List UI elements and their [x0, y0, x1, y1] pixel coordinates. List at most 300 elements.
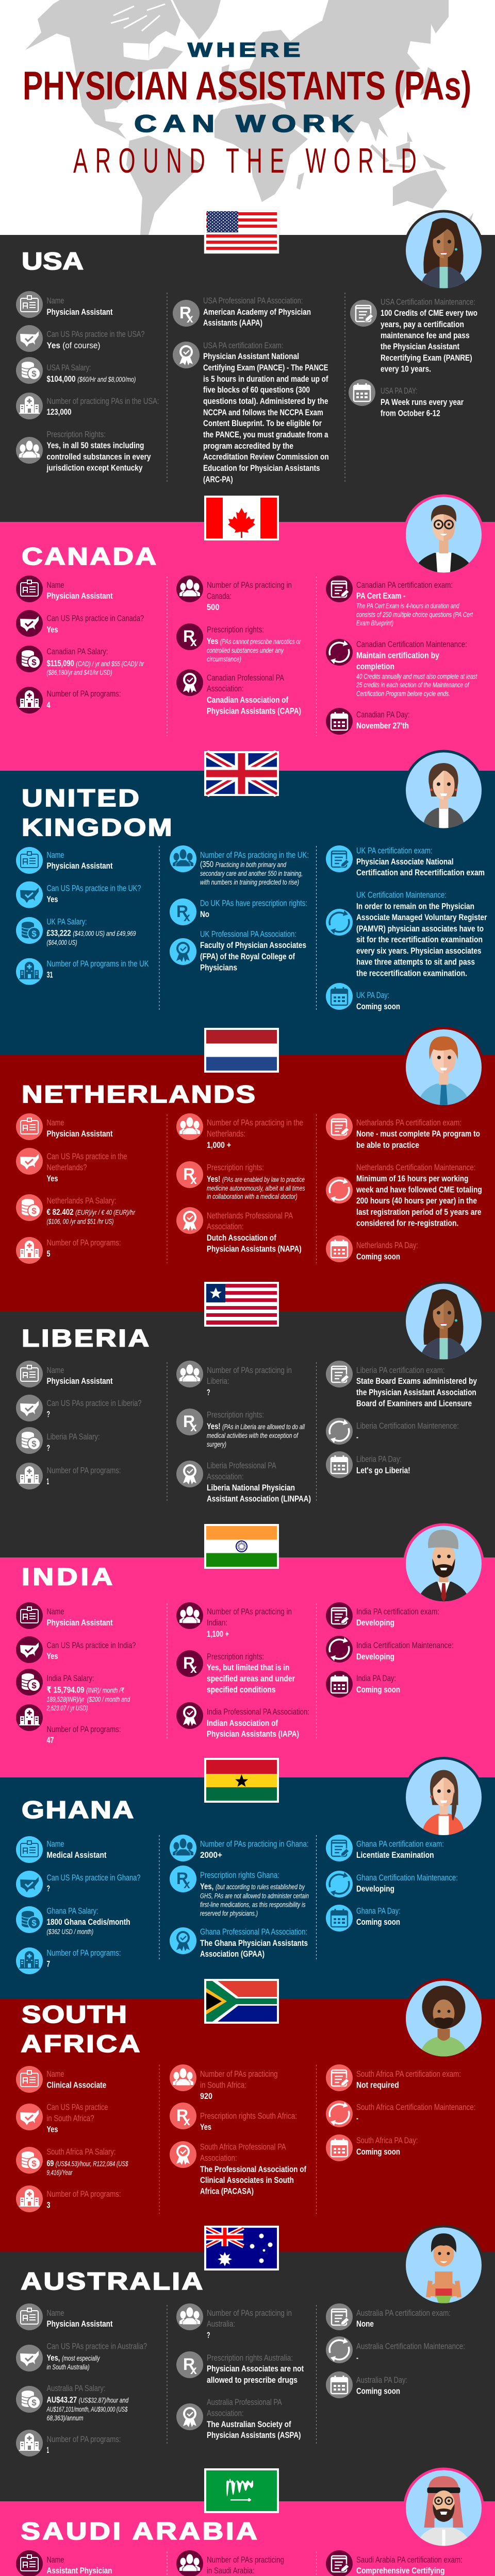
- item: Can practice: Can US PAs practice in the: [46, 1151, 127, 1161]
- item: Certification maintenance: Minimum of 16 hours per working: [356, 1174, 468, 1183]
- item: Programs: Number of PA programs:: [46, 1466, 121, 1476]
- item: Certification exam: [326, 1602, 439, 1629]
- item: Certification exam: [326, 1361, 477, 1409]
- panel: Ghana: [0, 1758, 495, 1998]
- item: Can practice: in South Africa?: [46, 2113, 94, 2123]
- item: Number practicing: Number of PAs practicing in: [207, 580, 292, 590]
- item: Certification exam: [326, 2064, 461, 2091]
- item: PA day: Coming soon: [356, 2147, 400, 2157]
- item: Programs: Number of PA programs:: [46, 1238, 121, 1248]
- item: Salary: 189,528(INR)/yr ($200 / month and: [46, 1696, 130, 1703]
- item: Name: Physician Assistant: [46, 307, 113, 317]
- item: PA day: November 27'th: [356, 721, 409, 731]
- item: Programs: Number of PA programs in the UK: [46, 959, 149, 969]
- item: Association: Dutch Association of: [207, 1233, 276, 1243]
- panel: Netherlands: [0, 1028, 495, 1311]
- item: Salary: [16, 357, 136, 384]
- item: Number practicing: [176, 1361, 292, 1397]
- item: Prescription rights: controlled substances in every: [46, 452, 151, 462]
- item: Salary: [16, 2147, 128, 2177]
- item: Association: Physicians: [200, 963, 237, 973]
- item: Association: Assistants (AAPA): [203, 318, 262, 328]
- item: Certification maintenance: India Certification Maintenance:: [356, 1640, 454, 1650]
- item: Programs: [16, 1463, 121, 1489]
- item: Certification exam: [326, 575, 473, 627]
- item: Name: [16, 2303, 113, 2330]
- item: Certification maintenance: Developing: [356, 1652, 394, 1662]
- item: Certification exam: Exam Blueprint): [356, 619, 393, 627]
- heading: Netherlands: NETHERLANDS: [22, 1081, 255, 1108]
- item: Certification exam: the PANCE, you must graduate from a: [203, 430, 328, 439]
- item: Prescription rights: Prescription rights:: [207, 1652, 264, 1662]
- item: Prescription rights: Prescription rights Australia:: [207, 2353, 293, 2363]
- item: Can practice: [16, 882, 141, 908]
- item: Number practicing: secondary care and another 550 in training,: [200, 870, 303, 877]
- item: Salary: AU$167,101/month, AU$90,000 (US$: [46, 2405, 128, 2413]
- item: Association: [176, 2397, 301, 2440]
- item: Certification exam: Developing: [356, 1618, 394, 1628]
- item: Certification exam: Accreditation Review Commission on: [203, 452, 329, 462]
- heading: Canada: CANADA: [22, 543, 156, 570]
- item: Certification maintenance: the Physician Assistant: [381, 342, 459, 351]
- item: Certification maintenance: [350, 297, 477, 374]
- item: Association: Physician Assistants (ASPA): [207, 2430, 301, 2440]
- item: Prescription rights: allowed to prescribe drugs: [207, 2375, 298, 2385]
- item: Salary: India PA Salary:: [46, 1673, 94, 1683]
- item: Number practicing: Australia:: [207, 2319, 235, 2329]
- item: Name: [16, 847, 113, 874]
- item: Number practicing: [170, 845, 309, 886]
- item: Number practicing: 920: [200, 2091, 212, 2101]
- item: Programs: Number of PA programs:: [46, 2434, 121, 2444]
- item: Number practicing: Number of PAs practicing in Ghana:: [200, 1839, 309, 1849]
- flag: UK: [204, 751, 279, 796]
- item: PA day: Coming soon: [356, 2386, 400, 2396]
- item: Salary: UK PA Salary:: [46, 917, 87, 926]
- item: Number practicing: Liberia:: [207, 1376, 229, 1386]
- item: Programs: Number of PA programs:: [46, 1948, 121, 1958]
- item: Salary: AU$43.27 (US$32.87)/hour and: [46, 2395, 128, 2405]
- item: Number practicing: in South Africa:: [200, 2080, 246, 2090]
- panel: Canada: [0, 496, 495, 771]
- flag: Netherlands: [204, 1028, 279, 1073]
- avatar: USA woman: [404, 211, 483, 292]
- item: Number practicing: Number of PAs practicing in: [207, 2308, 292, 2318]
- item: Prescription rights: surgery): [207, 1440, 226, 1448]
- item: Salary: ($86,180/yr and $41/hr USD): [46, 669, 112, 676]
- item: Association: USA Professional PA Association:: [203, 296, 303, 306]
- item: Programs: 3: [46, 2200, 51, 2210]
- item: Number practicing: (350 Practicing in both primary and: [200, 859, 286, 869]
- item: Name: Name: [46, 1839, 64, 1849]
- item: Certification maintenance: [326, 2336, 465, 2363]
- item: Salary: ($362 USD / month): [46, 1928, 93, 1936]
- item: Programs: [16, 958, 149, 985]
- item: Programs: 47: [46, 1735, 54, 1745]
- item: Number practicing: Netherlands:: [207, 1129, 245, 1139]
- item: Certification exam: Licentiate Examination: [356, 1850, 434, 1860]
- item: Name: Physician Assistant: [46, 861, 113, 871]
- item: Salary: [16, 1194, 135, 1226]
- item: Can practice: Can US PAs practice in Liberia?: [46, 1398, 141, 1408]
- item: PA day: Coming soon: [356, 1002, 400, 1011]
- item: Association: Netherlands Professional PA: [207, 1211, 293, 1221]
- item: Prescription rights: [170, 1866, 309, 1918]
- item: Association: The Australian Society of: [207, 2419, 291, 2429]
- item: Can practice: Can US PAs practice in the UK?: [46, 884, 141, 893]
- item: Salary: ₹ 15,794.09 (INR)/ month /₹: [46, 1685, 124, 1695]
- item: Name: Name: [46, 1365, 64, 1375]
- item: Can practice: Can US PAs practice in Ghana?: [46, 1873, 140, 1883]
- item: Name: [16, 2066, 106, 2093]
- item: Association: [176, 1702, 309, 1739]
- item: PA day: [326, 2134, 418, 2161]
- title line: can work: CAN WORK: [134, 110, 354, 137]
- item: PA day: [326, 1451, 410, 1478]
- item: Certification exam: Education for Physician Assistants: [203, 463, 320, 473]
- item: Prescription rights: Physician Associates are not: [207, 2364, 304, 2374]
- item: Prescription rights: medical activities with the exception of: [207, 1432, 299, 1439]
- item: Prescription rights: controlled substances under any: [207, 647, 284, 654]
- item: Certification exam: Ghana PA certification exam:: [356, 1839, 444, 1849]
- item: Prescription rights: Yes! (PAs in Liberia are allowed to do all: [207, 1421, 305, 1431]
- item: PA day: Canadian PA Day:: [356, 710, 409, 720]
- item: Prescription rights: [170, 899, 307, 925]
- item: Certification maintenance: Maintain certification by: [356, 650, 439, 660]
- item: Association: Association:: [207, 1222, 244, 1231]
- item: Prescription rights: specified areas and under: [207, 1674, 295, 1684]
- item: Certification maintenance: UK Certification Maintenance:: [356, 890, 447, 900]
- item: Certification maintenance: Ghana Certification Maintenance:: [356, 1873, 458, 1883]
- item: Prescription rights: Yes: [200, 2122, 211, 2132]
- item: Certification exam: is 5 hours in duration and made up of: [203, 374, 328, 384]
- item: Name: Physician Assistant: [46, 1376, 113, 1386]
- item: Salary: Canadian PA Salary:: [46, 647, 108, 656]
- item: Certification maintenance: Australia Certification Maintenance:: [356, 2342, 465, 2351]
- item: Number practicing: Number of PAs practicing in the: [207, 1118, 303, 1128]
- item: Certification exam: (ARC-PA): [203, 474, 233, 484]
- item: Certification maintenance: -: [356, 2113, 358, 2123]
- item: Name: [16, 575, 113, 602]
- avatar: Ghana woman with braid: [404, 1758, 483, 1838]
- item: Prescription rights: Yes! (PAs are enabled by law to practice: [207, 1174, 305, 1184]
- item: Certification exam: NCCPA and follows the NCCPA Exam: [203, 408, 323, 417]
- item: Programs: Number of PA programs:: [46, 1724, 121, 1734]
- item: Certification exam: Content Blueprint. To be eligible for: [203, 418, 322, 428]
- item: Salary: 9,416)/Year: [46, 2169, 73, 2177]
- item: Can practice: Can US PAs practice in Australia?: [46, 2342, 147, 2351]
- item: Certification maintenance: [326, 1163, 482, 1228]
- item: Number practicing: Number of PAs practicing in: [207, 1365, 292, 1375]
- item: Name: [16, 1361, 113, 1387]
- heading: Ghana: GHANA: [22, 1797, 134, 1824]
- item: PA day: Liberia PA Day:: [356, 1454, 402, 1464]
- item: Salary: £33,222 ($43,000 US) and £49,969: [46, 928, 136, 938]
- item: PA day: Let's go Liberia!: [356, 1466, 410, 1476]
- item: Certification exam: Saudi Arabia PA certification exam:: [356, 2555, 463, 2565]
- item: Salary: USA PA Salary:: [46, 363, 91, 372]
- item: Certification exam: UK PA certification exam:: [356, 845, 433, 855]
- item: Programs: [16, 1947, 121, 1974]
- item: Prescription rights: [16, 430, 151, 473]
- item: Programs: 5: [46, 1249, 51, 1259]
- item: Association: Assistant Association (LINPAA): [207, 1494, 311, 1503]
- item: Certification maintenance: [326, 1636, 454, 1663]
- item: Certification exam: The PA Cert Exam is 4-hours in duration and: [356, 602, 459, 610]
- panel: USA: [0, 210, 495, 522]
- item: Can practice: Can US PAs practice in Canada?: [46, 613, 144, 623]
- item: Prescription rights: Prescription rights:: [207, 624, 264, 634]
- item: Certification maintenance: Recertifying Exam (PANRE): [381, 353, 472, 363]
- item: Name: Assistant Physician: [46, 2566, 112, 2575]
- title: [23, 39, 471, 180]
- item: Salary: ?: [46, 1443, 50, 1453]
- item: Prescription rights: Prescription rights Ghana:: [200, 1870, 279, 1880]
- avatar: Saudi man: [404, 2469, 483, 2549]
- item: Certification exam: be able to practice: [356, 1140, 419, 1150]
- panel: Australia: [0, 2226, 495, 2502]
- item: PA day: Australia PA Day:: [356, 2375, 407, 2385]
- item: PA day: Coming soon: [356, 1251, 400, 1261]
- item: Salary: Australia PA Salary:: [46, 2383, 105, 2393]
- item: Name: Physician Assistant: [46, 1129, 113, 1139]
- panel: United Kingdom: [0, 751, 495, 1055]
- item: Number practicing: [176, 1602, 292, 1639]
- item: Prescription rights: [176, 2351, 304, 2385]
- item: Salary: Liberia PA Salary:: [46, 1432, 100, 1442]
- item: Number practicing: with numbers in training predicted to rise): [200, 878, 299, 886]
- item: Association: (FPA) of the Royal College of: [200, 952, 295, 961]
- item: Salary: 1800 Ghana Cedis/month: [46, 1917, 130, 1927]
- item: Prescription rights: Yes, (but according to rules established by: [200, 1882, 305, 1891]
- item: Salary: [16, 646, 144, 676]
- flag: Australia: [204, 2226, 279, 2270]
- item: Certification exam: PA Cert Exam -: [356, 591, 405, 601]
- item: Certification maintenance: Canadian Certification Maintenance:: [356, 639, 467, 649]
- item: Association: Ghana Professional PA Association:: [200, 1927, 307, 1937]
- item: Prescription rights: Yes (PAs cannot prescribe narcotics or: [207, 636, 301, 646]
- item: Certification exam: Liberia PA certification exam:: [356, 1365, 444, 1375]
- flag: USA: [204, 210, 279, 253]
- item: Salary: 2,623.07 / yr USD): [46, 1704, 88, 1712]
- item: Association: Association:: [207, 1472, 244, 1482]
- item: Can practice: [16, 2103, 108, 2134]
- item: Salary: ($106, 00 /yr and $51 /hr US): [46, 1218, 113, 1226]
- item: Certification exam: Netharlands PA certification exam:: [356, 1118, 461, 1128]
- panel: Saudi Arabia: [0, 2468, 495, 2576]
- item: Association: Physician Assistants (NAPA): [207, 1244, 302, 1254]
- item: Certification maintenance: [326, 1871, 458, 1897]
- item: Prescription rights: Do UK PAs have prescription rights:: [200, 899, 307, 908]
- item: PA day: [326, 2371, 407, 2398]
- item: Certification exam: Comprehensive Certifying: [356, 2566, 444, 2575]
- heading: United Kingdom: KINGDOM: [22, 814, 172, 841]
- item: PA day: from October 6-12: [381, 409, 440, 418]
- panel: Liberia: [0, 1282, 495, 1557]
- item: Certification exam: questions total). Administered by the: [203, 396, 328, 406]
- item: Can practice: Yes: [46, 1174, 58, 1183]
- item: Certification exam: South Africa PA certification exam:: [356, 2069, 461, 2079]
- heading: Saudi Arabia: SAUDI ARABIA: [21, 2518, 257, 2545]
- item: Prescription rights: [170, 2103, 297, 2132]
- item: Association: Indian Association of: [207, 1718, 278, 1728]
- item: Prescription rights: Yes, but limited that is in: [207, 1663, 289, 1672]
- item: Prescription rights: GHS, PAs are not allowed to administer certain: [200, 1892, 309, 1900]
- item: PA day: PA Week runs every year: [381, 397, 464, 407]
- item: Prescription rights: Yes, in all 50 states including: [46, 440, 144, 450]
- heading: South Africa: AFRICA: [21, 2030, 140, 2058]
- item: Prescription rights: Prescription rights:: [207, 1163, 264, 1173]
- avatar: India man with turban: [404, 1524, 483, 1605]
- item: Association: Clinical Associates in South: [200, 2175, 294, 2185]
- item: Association: [176, 669, 301, 716]
- item: Association: Liberia National Physician: [207, 1483, 295, 1493]
- item: Name: [16, 1602, 113, 1629]
- item: Salary: $115,090 (CAD) / yr and $55 (CAD)/ hr: [46, 658, 144, 668]
- item: Name: Physician Assistant: [46, 1618, 113, 1628]
- item: Certification exam: USA PA certification Exam:: [203, 341, 284, 350]
- item: Salary: ($64,000 US): [46, 939, 77, 946]
- item: Name: [16, 1113, 113, 1140]
- item: Salary: Ghana PA Salary:: [46, 1906, 98, 1916]
- heading: South Africa: [21, 2001, 140, 2058]
- panel: India: [0, 1524, 495, 1777]
- item: Name: Physician Assistant: [46, 591, 113, 601]
- item: Salary: [16, 1427, 100, 1454]
- item: Salary: [16, 2383, 128, 2422]
- item: Prescription rights: [176, 623, 301, 663]
- item: Number practicing: [170, 1835, 309, 1861]
- item: Prescription rights: reserved for physicians.): [200, 1909, 258, 1918]
- avatar: Netherlands man: [404, 1028, 483, 1109]
- item: Certification maintenance: every 10 years.: [381, 364, 431, 374]
- item: Programs: [16, 687, 121, 714]
- item: Number practicing: Indian:: [207, 1618, 227, 1628]
- item: Number practicing: ?: [207, 1387, 210, 1397]
- item: Number practicing: Canada:: [207, 591, 232, 601]
- item: Can practice: Yes, (most especially: [46, 2353, 100, 2363]
- item: Association: [170, 2141, 306, 2196]
- item: Can practice: Netherlands?: [46, 1163, 87, 1173]
- item: Can practice: Yes: [46, 624, 58, 634]
- item: Prescription rights: Prescription rights:: [207, 1410, 264, 1420]
- item: Can practice: Can US PAs practice in India?: [46, 1640, 136, 1650]
- item: Salary: Netherlands PA Salary:: [46, 1196, 117, 1206]
- item: Name: [16, 1836, 107, 1863]
- item: Certification maintenance: -: [356, 2353, 358, 2363]
- item: Certification exam: [326, 2303, 451, 2330]
- item: Certification exam: [326, 845, 485, 877]
- item: PA day: [326, 983, 400, 1011]
- item: PA day: Ghana PA Day:: [356, 1906, 401, 1916]
- item: Salary: 68,363)/annum: [46, 2414, 84, 2422]
- title line: around the world: AROUND THE WORLD: [73, 141, 417, 180]
- item: Programs: [16, 2185, 121, 2212]
- item: Number practicing: Number of practicing PAs in the USA:: [46, 396, 159, 406]
- avatar: South Africa man with afro: [404, 1979, 483, 2060]
- item: Certification exam: Certifying Exam (PANCE) - The PANCE: [203, 363, 328, 372]
- item: Can practice: in South Australia): [46, 2363, 90, 2371]
- heading: United Kingdom: [22, 785, 172, 841]
- item: Programs: [16, 1704, 121, 1745]
- item: Association: [170, 929, 306, 973]
- item: Certification exam: [173, 341, 329, 484]
- item: Can practice: [16, 2342, 147, 2371]
- panel: South Africa: [0, 1979, 495, 2252]
- item: Certification maintenance: [326, 1418, 459, 1445]
- item: Certification exam: five blocks of 60 questions (300: [203, 385, 310, 395]
- item: Number practicing: Number of PAs practicing: [200, 2069, 278, 2079]
- item: Number practicing: Number of PAs practicing: [207, 2555, 284, 2565]
- item: Programs: Number of PA programs:: [46, 2189, 121, 2199]
- item: PA day: USA PA DAY:: [381, 386, 418, 396]
- item: PA day: South Africa PA Day:: [356, 2136, 418, 2145]
- item: Association: American Academy of Physician: [203, 307, 311, 317]
- item: Prescription rights: [176, 1409, 305, 1448]
- item: Programs: 31: [46, 970, 53, 980]
- avatar: Canada man with glasses: [404, 496, 483, 576]
- item: Can practice: [16, 325, 144, 352]
- item: Number practicing: Number of PAs practicing in: [207, 1607, 292, 1617]
- item: Certification maintenance: considered for re-registration.: [356, 1218, 458, 1228]
- item: Certification maintenance: completion: [356, 662, 394, 671]
- item: Name: [16, 2550, 112, 2576]
- item: Name: Name: [46, 296, 64, 306]
- item: Association: Africa (PACASA): [200, 2187, 254, 2196]
- item: Number practicing: in Saudi Arabia:: [207, 2566, 255, 2575]
- item: Number practicing: [176, 575, 292, 612]
- item: Name: Name: [46, 850, 64, 860]
- item: Name: Clinical Associate: [46, 2080, 106, 2090]
- item: Can practice: Yes: [46, 894, 58, 904]
- heading: India: INDIA: [22, 1564, 112, 1590]
- item: Can practice: [16, 610, 144, 637]
- item: Certification exam: [326, 1835, 444, 1861]
- item: Certification maintenance: Liberia Certification Maintenence:: [356, 1421, 459, 1431]
- item: Can practice: ?: [46, 1410, 50, 1419]
- item: Association: Physician Assistants (IAPA): [207, 1729, 299, 1739]
- item: Association: Association:: [200, 2153, 237, 2163]
- item: Prescription rights: jurisdiction except Kentucky: [46, 463, 143, 473]
- item: PA day: Coming soon: [356, 1685, 400, 1694]
- item: Number practicing: 123,000: [46, 407, 71, 417]
- item: Prescription rights: specified conditions: [207, 1685, 275, 1694]
- item: Number practicing: 500: [207, 602, 220, 612]
- heading: South Africa: SOUTH: [22, 2001, 127, 2028]
- item: Certification exam: Not required: [356, 2080, 399, 2090]
- flag: India: [204, 1524, 279, 1569]
- item: Prescription rights: Prescription rights South Africa:: [200, 2111, 297, 2121]
- item: Association: Canadian Professional PA: [207, 673, 284, 683]
- item: Can practice: Yes: [46, 1651, 58, 1661]
- item: Name: Name: [46, 1118, 64, 1128]
- item: Association: [173, 296, 311, 328]
- item: Can practice: [16, 1636, 136, 1663]
- item: Can practice: ?: [46, 1884, 50, 1893]
- item: PA day: UK PA Day:: [356, 990, 389, 1000]
- item: Salary: South Africa PA Salary:: [46, 2147, 116, 2157]
- item: PA day: Netherlands PA Day:: [356, 1241, 418, 1250]
- heading: United Kingdom: UNITED: [22, 785, 139, 812]
- item: PA day: Coming soon: [356, 1917, 400, 1927]
- heading: USA: USA: [22, 248, 84, 275]
- item: Association: Association (GPAA): [200, 1949, 265, 1959]
- item: Name: [16, 291, 113, 318]
- item: PA day: [326, 1905, 401, 1931]
- item: Salary: [16, 1906, 130, 1936]
- heading: Liberia: LIBERIA: [22, 1325, 149, 1352]
- item: Programs: 1: [46, 1477, 49, 1486]
